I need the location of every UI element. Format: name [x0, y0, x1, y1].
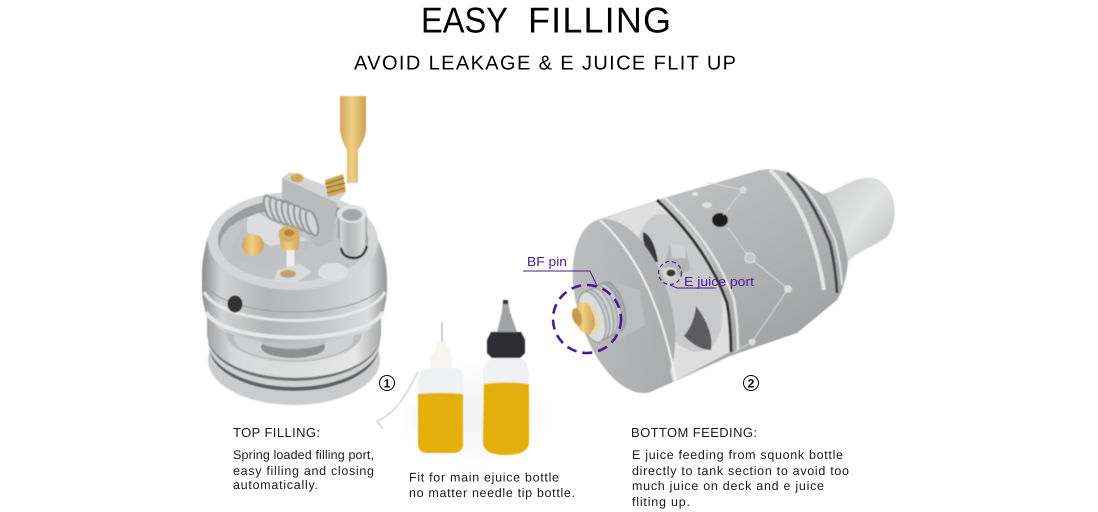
filling port hole — [318, 263, 348, 281]
juice — [483, 382, 529, 455]
glass tank — [207, 280, 381, 378]
text block: top filling: easy filling and closing — [233, 464, 374, 478]
post front — [232, 213, 308, 267]
window slots — [643, 232, 658, 262]
highlight band — [770, 170, 824, 290]
callout: E juice port — [658, 262, 754, 289]
number 1: 1 — [384, 376, 391, 390]
text block: bottom feeding: BOTTOM FEEDING: — [631, 425, 757, 440]
vent details — [712, 213, 728, 227]
connector neck shadow — [612, 282, 645, 340]
fill port chimney — [338, 214, 367, 256]
text block: bottom feeding: E juice feeding from squonk bottle — [632, 448, 843, 462]
text block: bottom feeding: much juice on deck and e juice — [632, 479, 824, 493]
metal band — [202, 237, 387, 343]
engraved lines — [705, 182, 788, 352]
title: EASY — [421, 0, 508, 40]
text block: top filling: automatically. — [233, 478, 318, 492]
o-ring on top — [787, 173, 837, 293]
text block: bottle note: no matter needle tip bottle. — [409, 486, 575, 500]
text block: top filling — [233, 425, 374, 492]
text block: bottle note — [409, 470, 575, 500]
text block: bottle note: Fit for main ejuice bottle — [409, 470, 559, 484]
callout: BF pin: BF pin — [527, 254, 567, 269]
brass pin — [570, 299, 603, 337]
illustration: bottom feeding atomizer — [554, 169, 895, 406]
text block: top filling: Spring loaded filling port, — [233, 448, 374, 462]
glass window — [600, 200, 730, 382]
bottle cap — [430, 342, 452, 368]
illustration: twist cap bottle — [483, 300, 529, 455]
text block: bottom feeding: directly to tank section to avoid too — [632, 464, 849, 478]
text block: bottom feeding — [631, 425, 849, 509]
e juice port hole — [663, 267, 677, 279]
number 1 — [380, 376, 394, 390]
icon: gold filling tool — [340, 96, 366, 183]
coil — [261, 194, 321, 237]
top rim — [208, 192, 378, 290]
text block: top filling: TOP FILLING: — [233, 425, 320, 440]
main body — [597, 169, 848, 392]
inner post — [664, 244, 690, 276]
mouthpiece — [822, 178, 895, 264]
number 2: 2 — [748, 376, 755, 390]
air hole — [228, 296, 242, 312]
title: FILLING — [528, 0, 671, 40]
centre pin — [286, 250, 294, 271]
illustration: needle tip bottle — [377, 322, 463, 453]
black cap — [487, 332, 525, 358]
needle wire — [377, 372, 418, 429]
bottle body — [418, 368, 463, 394]
nozzle — [497, 300, 517, 332]
atomizer base — [208, 315, 380, 405]
number 2 — [744, 376, 758, 390]
brass top screw — [279, 236, 300, 250]
bottle shadow — [414, 377, 534, 453]
juice — [418, 393, 463, 453]
threaded connector — [573, 279, 631, 345]
illustration: top filling atomizer — [202, 172, 387, 405]
text block: bottom feeding: fliting up. — [632, 495, 690, 509]
subtitle: AVOID LEAKAGE & E JUICE FLIT UP — [354, 52, 736, 74]
title — [421, 0, 671, 40]
post rear — [282, 172, 345, 248]
threaded brass screw — [325, 174, 346, 197]
callout: BF pin — [523, 254, 621, 353]
o-ring window edge — [657, 200, 731, 352]
base disc — [554, 206, 694, 406]
bottle body — [483, 358, 529, 384]
brass face screw — [242, 234, 264, 256]
callout: E juice port: E juice port — [684, 274, 754, 289]
